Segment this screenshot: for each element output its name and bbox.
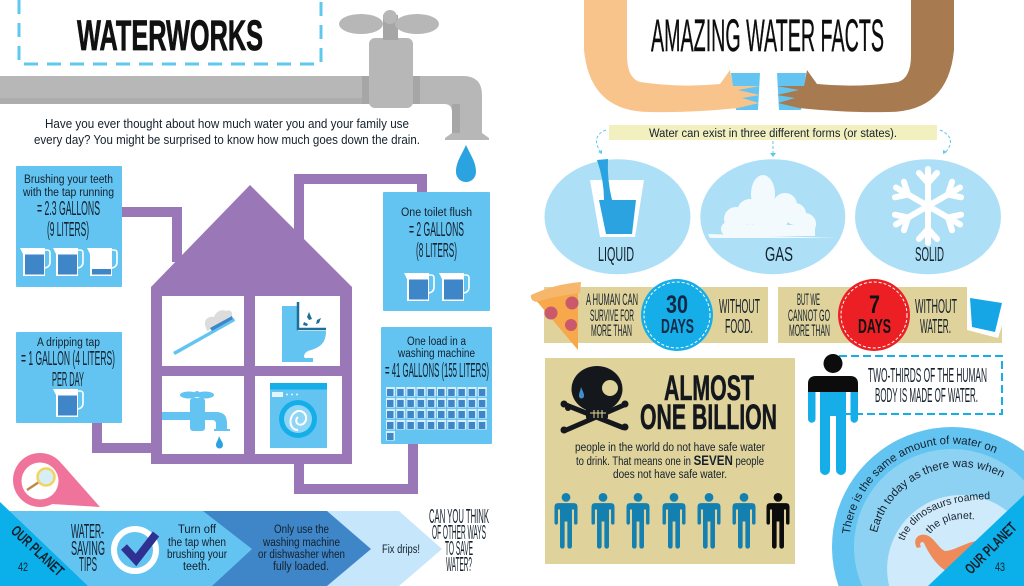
tips heading (71, 521, 105, 576)
state: liquid (544, 159, 690, 274)
icon: skull and crossbones (560, 366, 628, 434)
badge: 7 days: 7 (869, 291, 880, 319)
fact box: brushing teeth: Brushing your teeth (24, 174, 113, 186)
page corner: 43 (928, 495, 1024, 586)
fact box: toilet flush: (8 LITERS) (416, 240, 457, 262)
body text: does not have safe water. (613, 469, 727, 481)
fact box: washing machine (381, 327, 492, 444)
intro text (34, 116, 420, 147)
body text (575, 442, 765, 481)
curved text: There is the same amount of water on (842, 436, 997, 534)
icon: human body two-thirds water (808, 354, 858, 475)
icon: toothbrush (173, 310, 235, 355)
fact box: dripping tap: PER DAY (52, 369, 84, 391)
fact bar: water (778, 278, 1014, 351)
icon: pizza (531, 282, 581, 350)
fact bar: food: SURVIVE FOR (590, 306, 634, 325)
illustration: arms holding glasses (584, 0, 954, 112)
fact bar: water: WATER. (920, 316, 951, 338)
fact box: dripping tap (16, 332, 122, 423)
dinosaur water fact circle (832, 427, 1024, 586)
body text: people in the world do not have safe water (575, 442, 765, 454)
fact bar: food: FOOD. (725, 316, 753, 338)
fact bar: food: WITHOUT (719, 296, 760, 318)
infographic spread: OF OTHER WAYS (432, 522, 486, 544)
page corner: 43: 43 (995, 560, 1005, 574)
badge: 30 days: DAYS (661, 316, 694, 338)
fact bar: water: MORE THAN (789, 321, 830, 340)
badge: 7 days (838, 279, 910, 351)
state: solid (855, 159, 1001, 274)
badge: 7 days: DAYS (858, 316, 891, 338)
fact box: brushing teeth: = 2.3 GALLONS (37, 198, 100, 220)
fact bar: water: WITHOUT (915, 296, 957, 318)
fact box: brushing teeth: (9 LITERS) (47, 219, 89, 241)
tip: full loads: or dishwasher when (258, 549, 345, 561)
heading: almost one billion (640, 369, 777, 437)
tip: full loads: washing machine (262, 537, 340, 549)
question: other ways to save water (429, 506, 489, 576)
infographic spread: CAN YOU THINK (429, 506, 489, 528)
icon: washing machine (270, 383, 327, 448)
tap and pipe (0, 10, 489, 140)
purple connecting pipes (92, 174, 427, 494)
fact box: washing machine: One load in a (407, 336, 467, 348)
fact bar: food: A HUMAN CAN (586, 290, 638, 309)
tip: turn off tap: Turn off (178, 524, 217, 536)
intro text: Have you ever thought about how much water you and your family use (45, 116, 409, 131)
pictogram: one in seven people (554, 493, 790, 549)
banner: three forms of water (609, 125, 937, 140)
state: gas (700, 159, 845, 274)
tip: turn off tap: the tap when (168, 537, 226, 549)
curved text: the dinosaurs roamed (898, 492, 990, 540)
icon: water drop (456, 145, 476, 182)
tip: turn off tap: brushing your (167, 549, 227, 561)
infographic spread: = 41 GALLONS (155 LITERS) (385, 360, 489, 382)
water-saving tips banner (0, 502, 489, 586)
heading: almost one billion: ONE BILLION (640, 398, 777, 437)
icon: magnifying glass pin (13, 453, 100, 507)
panel: almost one billion (545, 358, 795, 564)
question: other ways to save water: TO SAVE (445, 538, 473, 560)
question: other ways to save water: WATER? (446, 554, 472, 576)
water-saving tips banner: SAVING (71, 538, 105, 560)
fact box: brushing teeth: with the tap running (22, 187, 114, 199)
fact box: toilet flush: = 2 GALLONS (409, 219, 464, 241)
fact bar: water: BUT WE (797, 290, 820, 309)
icon: dinosaur (915, 535, 1005, 586)
tip: turn off tap: teeth. (183, 561, 210, 573)
fact bar: food (531, 279, 768, 351)
tips heading: TIPS (79, 554, 97, 576)
fact box: brushing teeth (16, 166, 122, 287)
fact box: toilet flush (383, 192, 490, 311)
fact box: dripping tap: A dripping tap (37, 337, 100, 349)
callout: two-thirds water (839, 356, 1002, 414)
dashed arrows (597, 130, 950, 157)
icon: toilet (282, 302, 326, 362)
tip: fix drips: Fix drips! (382, 544, 420, 556)
heading: almost one billion: ALMOST (664, 369, 754, 408)
page corner: 42 (0, 502, 88, 586)
icon: glass of water (967, 278, 1014, 338)
fact bar: water: CANNOT GO (788, 306, 830, 325)
tip: full loads: fully loaded. (273, 561, 329, 573)
left page: Waterworks (0, 0, 492, 586)
state: liquid: LIQUID (598, 244, 634, 266)
badge: 30 days (641, 279, 713, 351)
icon: check mark (114, 529, 156, 571)
tip: full loads (258, 524, 345, 573)
intro text: every day? You might be surprised to know how much goes down the drain. (34, 132, 420, 147)
tip: turn off tap (167, 524, 227, 573)
curved text: the planet. (926, 512, 974, 533)
page corner: 42: 42 (18, 560, 28, 574)
fact bar: food: MORE THAN (591, 321, 632, 340)
left page: Waterworks: = 1 GALLON (4 LITERS) (21, 348, 115, 370)
water-saving tips banner: WATER- (71, 521, 104, 543)
tip: full loads: Only use the (274, 524, 329, 536)
icon: tap (162, 391, 230, 448)
title box: Waterworks (19, 0, 321, 64)
house (151, 185, 352, 464)
state: solid: SOLID (915, 244, 944, 266)
curved text: Earth today as there was when (870, 460, 1004, 532)
right page: Amazing Water Facts (530, 0, 1024, 586)
badge: 30 days: 30 (666, 291, 688, 319)
body text: to drink. That means one in SEVEN people (576, 452, 764, 468)
state: gas: GAS (765, 244, 793, 266)
fact box: toilet flush: One toilet flush (401, 207, 472, 219)
fact box: washing machine: washing machine (397, 348, 475, 360)
title box: Waterworks: WATERWORKS (77, 12, 263, 60)
banner: three forms of water: Water can exist in three different forms (or states). (649, 128, 897, 140)
